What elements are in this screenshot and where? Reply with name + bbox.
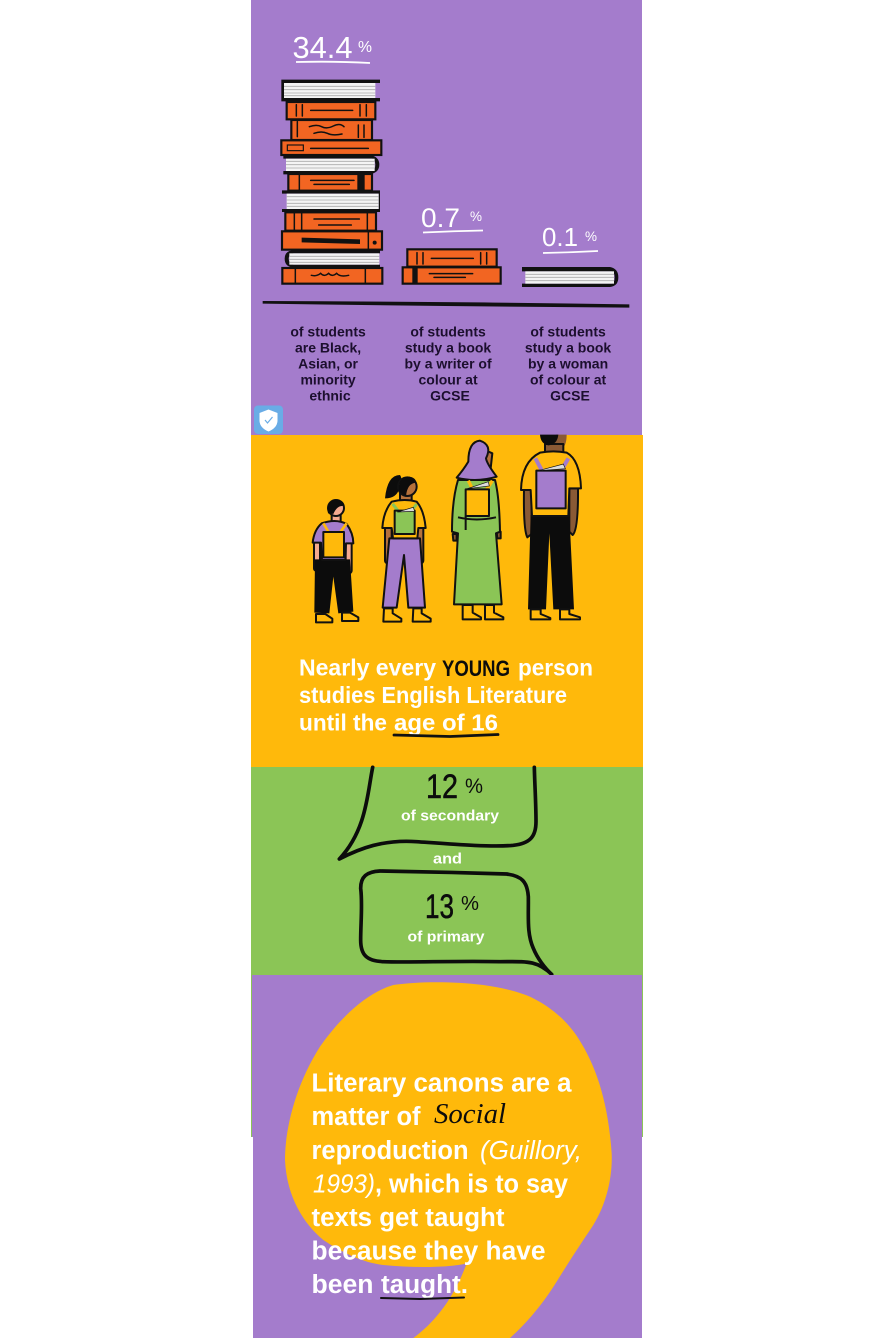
stack: 34.4 percent bbox=[281, 80, 382, 284]
value: 0.7 percent: % bbox=[470, 208, 482, 224]
heading: young people: age of 16 bbox=[394, 710, 498, 736]
label: writer of colour: of students bbox=[410, 324, 486, 340]
quotation text: 1993) bbox=[313, 1170, 375, 1198]
quotation text bbox=[312, 1070, 582, 1299]
quotation text: reproduction bbox=[312, 1137, 468, 1165]
label: woman of colour: GCSE bbox=[550, 388, 590, 404]
label: students: Asian, or bbox=[298, 356, 359, 372]
speech bubble: 12 percent bbox=[339, 767, 536, 859]
label: students: minority bbox=[300, 372, 356, 388]
quotation text: (Guillory, bbox=[480, 1137, 582, 1165]
panel: young people bbox=[251, 435, 643, 767]
label: writer of colour: GCSE bbox=[430, 388, 470, 404]
student: tall man bbox=[521, 435, 581, 619]
quotation text: Literary canons are a bbox=[312, 1070, 572, 1098]
value: 0.1 percent bbox=[542, 222, 598, 253]
heading: young people: studies English Literature bbox=[299, 682, 567, 708]
student: girl with ponytail bbox=[382, 475, 431, 622]
heading: young people: until the bbox=[299, 710, 387, 736]
value: 0.1 percent: 0.1 bbox=[542, 222, 578, 252]
label: writer of colour: by a writer of bbox=[404, 356, 492, 372]
quotation text: because they have bbox=[312, 1238, 546, 1266]
label: students: of students bbox=[290, 324, 366, 340]
label: students: ethnic bbox=[309, 388, 351, 404]
speech bubble: 12 percent: of secondary bbox=[401, 808, 500, 824]
quotation mark shape bbox=[285, 982, 612, 1338]
speech bubble: 13 percent: 13 bbox=[425, 888, 454, 926]
label: students: are Black, bbox=[295, 340, 361, 356]
quotation text: taught. bbox=[381, 1271, 468, 1299]
baseline bbox=[263, 301, 629, 308]
quotation text: been bbox=[312, 1271, 374, 1299]
value: 0.7 percent: 0.7 bbox=[421, 203, 460, 233]
illustration: four students bbox=[313, 435, 581, 622]
heading: young people: Nearly every bbox=[299, 654, 436, 680]
heading: young people: person bbox=[518, 654, 593, 680]
handwritten word: young: YOUNG bbox=[442, 656, 510, 681]
value: 34.4 percent: 34.4 bbox=[292, 30, 352, 65]
quotation text: , which is to say bbox=[375, 1170, 569, 1198]
panel: quotation bbox=[252, 975, 642, 1338]
panel: book statistics bbox=[251, 0, 642, 435]
speech bubble: 13 percent: % bbox=[461, 893, 479, 915]
label: woman of colour: study a book bbox=[525, 340, 611, 356]
handwritten word: social: Social bbox=[434, 1098, 506, 1130]
label: woman of colour: by a woman bbox=[528, 356, 608, 372]
speech bubble: 13 percent bbox=[361, 871, 552, 974]
label: woman of colour: of students bbox=[530, 324, 606, 340]
speech bubble: 12 percent: % bbox=[465, 775, 483, 798]
speech bubble: 12 percent: 12 bbox=[426, 768, 458, 806]
panel: speech bubbles bbox=[251, 767, 643, 1137]
heading: young people bbox=[299, 654, 593, 736]
value: 0.7 percent bbox=[421, 203, 483, 233]
speech bubble: 13 percent: of primary bbox=[408, 928, 485, 946]
text: and: and bbox=[433, 850, 462, 868]
stack: 0.7 percent bbox=[403, 249, 501, 284]
value: 0.1 percent: % bbox=[585, 228, 597, 244]
stack: 0.1 percent bbox=[522, 267, 618, 287]
book stack chart bbox=[263, 80, 629, 308]
label: woman of colour: of colour at bbox=[530, 372, 606, 388]
quotation text: matter of bbox=[312, 1103, 421, 1131]
icon: shield badge bbox=[254, 406, 283, 434]
label: writer of colour: study a book bbox=[405, 340, 491, 356]
student: child bbox=[313, 500, 358, 622]
student: woman in hijab bbox=[452, 441, 503, 619]
value: 34.4 percent: % bbox=[358, 39, 372, 56]
label: writer of colour: colour at bbox=[418, 372, 478, 388]
quotation text: texts get taught bbox=[312, 1204, 505, 1232]
